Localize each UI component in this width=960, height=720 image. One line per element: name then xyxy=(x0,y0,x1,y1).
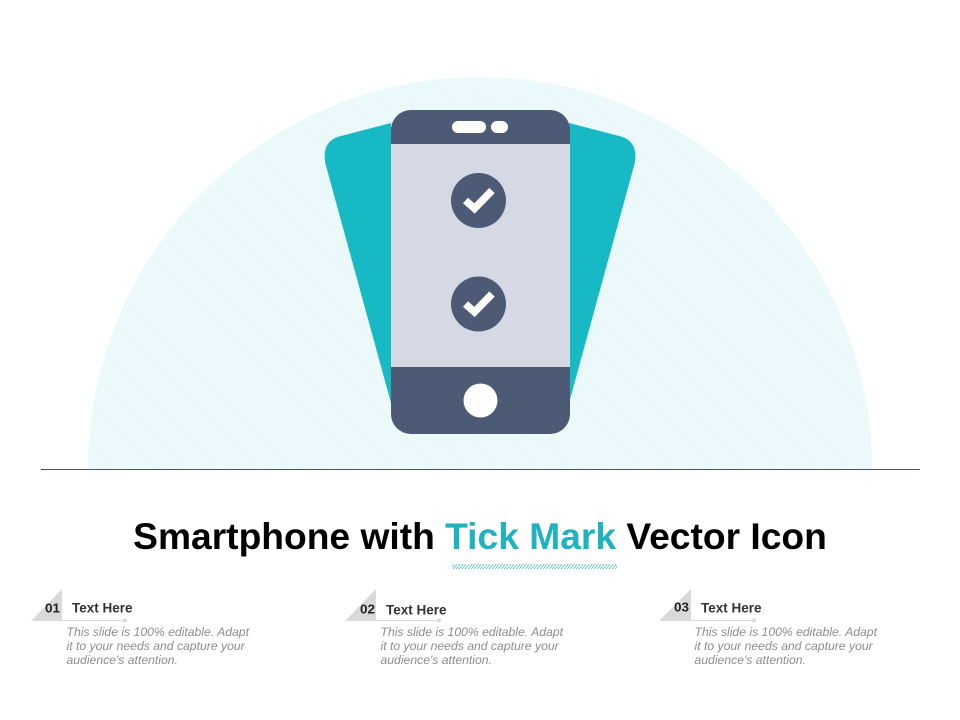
description: This slide is 100% editable. Adapt xyxy=(694,625,878,639)
connector line xyxy=(376,620,439,622)
phone home button xyxy=(464,384,498,418)
phone speaker pill xyxy=(452,121,486,133)
description: it to your needs and capture your xyxy=(66,639,246,653)
description: audience's attention. xyxy=(694,653,806,667)
description: audience's attention. xyxy=(380,653,492,667)
icon: smartphone with tick marks xyxy=(325,110,635,434)
number: 02 xyxy=(360,602,375,616)
description: This slide is 100% editable. Adapt xyxy=(66,625,250,639)
heading: Text Here xyxy=(72,600,133,616)
title: Smartphone with Tick Mark Vector Icon xyxy=(133,515,827,557)
number: 01 xyxy=(45,602,60,616)
heading: Text Here xyxy=(386,602,447,618)
number tab xyxy=(31,589,62,621)
description: This slide is 100% editable. Adapt xyxy=(380,625,564,639)
item 02 xyxy=(345,589,566,667)
connector line xyxy=(62,620,125,622)
right teal card xyxy=(569,123,635,403)
phone screen xyxy=(391,144,570,367)
horizontal baseline xyxy=(41,469,920,470)
description: audience's attention. xyxy=(66,653,178,667)
item 03 xyxy=(659,589,880,667)
heading: Text Here xyxy=(701,600,762,616)
description: it to your needs and capture your xyxy=(694,639,874,653)
item 01 xyxy=(31,589,252,667)
number: 03 xyxy=(674,600,689,614)
phone body xyxy=(391,110,570,434)
phone camera pill xyxy=(491,121,508,133)
number tab xyxy=(345,589,376,621)
connector line xyxy=(691,620,754,622)
title underline hatch xyxy=(452,564,617,569)
icon: first tick badge xyxy=(451,173,506,228)
hatched semicircle background xyxy=(88,77,872,469)
description: it to your needs and capture your xyxy=(380,639,560,653)
left teal card xyxy=(325,123,391,403)
icon: second tick badge xyxy=(451,276,506,332)
number tab xyxy=(659,589,691,621)
